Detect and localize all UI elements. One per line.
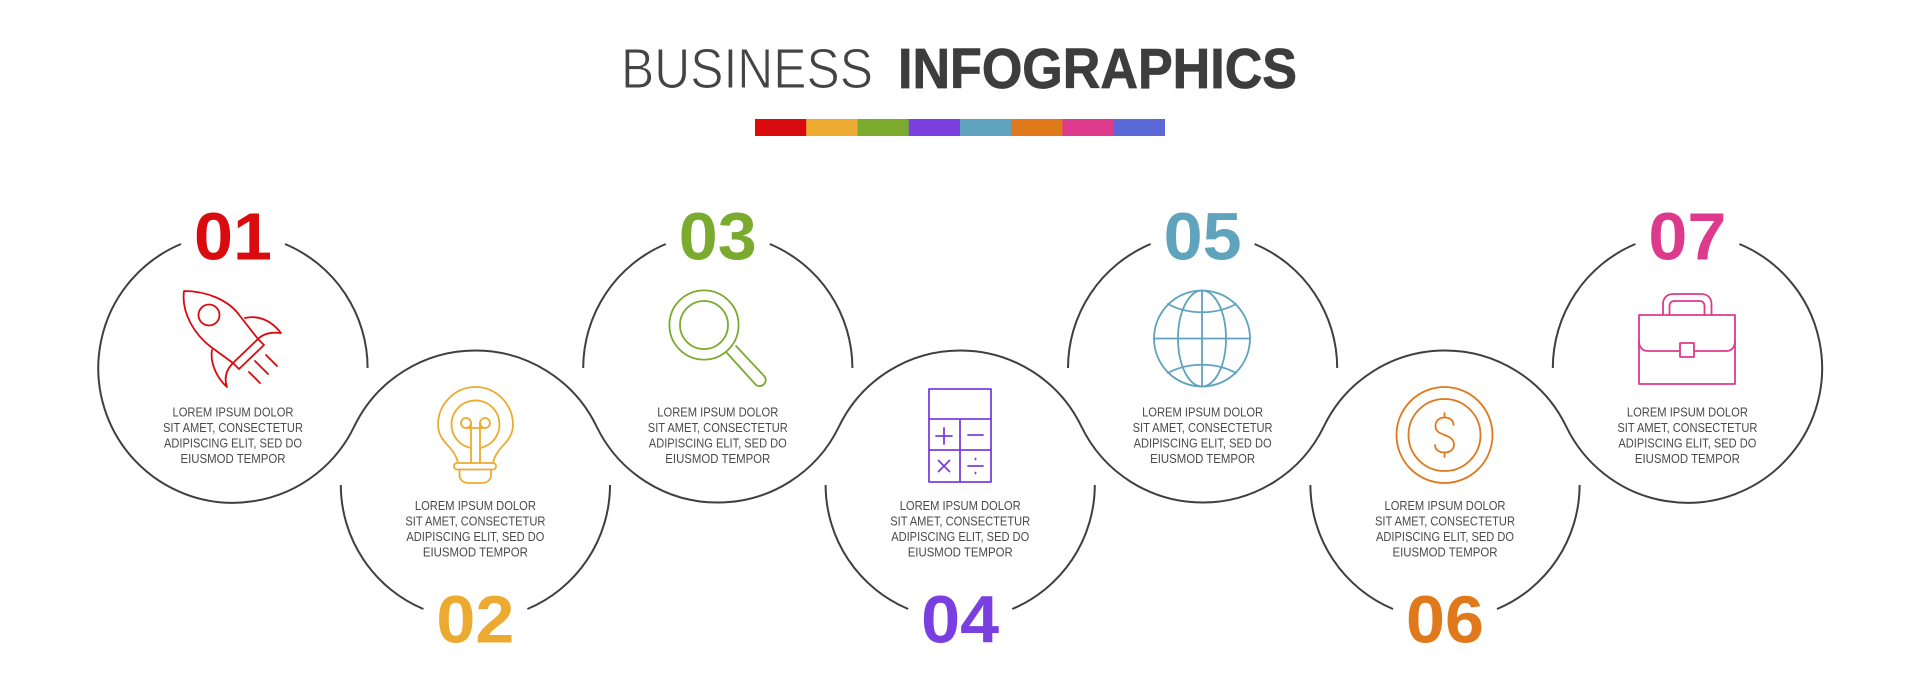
description 07: LOREM IPSUM DOLOR <box>1627 406 1748 420</box>
panel: step 04 <box>826 389 1095 658</box>
description 02: LOREM IPSUM DOLOR <box>415 499 536 513</box>
description 01: ADIPISCING ELIT, SED DO <box>164 436 302 450</box>
description 03: LOREM IPSUM DOLOR <box>657 406 778 420</box>
description 01 <box>163 406 303 466</box>
description 03 <box>648 406 788 466</box>
description 05: EIUSMOD TEMPOR <box>1150 452 1255 466</box>
description 06: LOREM IPSUM DOLOR <box>1384 499 1506 513</box>
description 04 <box>890 499 1030 559</box>
number 05: 05 <box>1164 200 1242 274</box>
panel: step 07 <box>1553 200 1757 466</box>
description 05: ADIPISCING ELIT, SED DO <box>1134 436 1272 450</box>
description 01: EIUSMOD TEMPOR <box>180 452 286 466</box>
number 01: 01 <box>194 200 272 274</box>
number 07: 07 <box>1648 200 1726 274</box>
description 06 <box>1375 499 1515 559</box>
icon: rocket <box>184 291 281 387</box>
icon: briefcase <box>1639 294 1735 384</box>
description 03: EIUSMOD TEMPOR <box>665 452 770 466</box>
description 02: SIT AMET, CONSECTETUR <box>405 515 545 529</box>
colour bar <box>755 119 1165 136</box>
description 04: LOREM IPSUM DOLOR <box>900 499 1021 513</box>
description 03: SIT AMET, CONSECTETUR <box>648 421 788 435</box>
description 04: SIT AMET, CONSECTETUR <box>890 515 1030 529</box>
description 01: LOREM IPSUM DOLOR <box>172 406 294 420</box>
icon: light bulb <box>438 387 513 483</box>
description 06: ADIPISCING ELIT, SED DO <box>1376 530 1514 544</box>
panel: step 02 <box>341 387 610 658</box>
number 02: 02 <box>436 582 514 658</box>
description 05: SIT AMET, CONSECTETUR <box>1133 421 1273 435</box>
description 03: ADIPISCING ELIT, SED DO <box>649 436 787 450</box>
description 06: EIUSMOD TEMPOR <box>1392 545 1498 559</box>
description 04: EIUSMOD TEMPOR <box>908 545 1013 559</box>
description 07: EIUSMOD TEMPOR <box>1635 452 1740 466</box>
description 02: ADIPISCING ELIT, SED DO <box>406 530 545 544</box>
icon: dollar coin <box>1396 387 1492 483</box>
description 06: SIT AMET, CONSECTETUR <box>1375 515 1515 529</box>
title: BUSINESS <box>621 37 873 101</box>
icon: magnifying glass <box>669 290 766 386</box>
description 07: ADIPISCING ELIT, SED DO <box>1618 436 1757 450</box>
description 01: SIT AMET, CONSECTETUR <box>163 421 303 435</box>
description 05 <box>1133 406 1273 466</box>
description 04: ADIPISCING ELIT, SED DO <box>891 530 1029 544</box>
wave connector line <box>98 244 1822 503</box>
description 05: LOREM IPSUM DOLOR <box>1142 406 1263 420</box>
description 02: EIUSMOD TEMPOR <box>423 545 528 559</box>
number 04: 04 <box>921 582 999 658</box>
icon: calculator <box>929 389 991 482</box>
panel: step 06 <box>1310 387 1580 658</box>
icon: globe <box>1154 290 1250 386</box>
description 07: SIT AMET, CONSECTETUR <box>1617 421 1757 435</box>
panel: step 05 <box>1068 200 1337 466</box>
title <box>621 37 1297 101</box>
description 07 <box>1617 406 1757 466</box>
number 03: 03 <box>679 200 757 274</box>
panel: step 01 <box>163 200 368 466</box>
title: INFOGRAPHICS <box>898 37 1297 101</box>
panel: step 03 <box>583 200 852 466</box>
description 02 <box>405 499 545 559</box>
number 06: 06 <box>1406 582 1484 658</box>
